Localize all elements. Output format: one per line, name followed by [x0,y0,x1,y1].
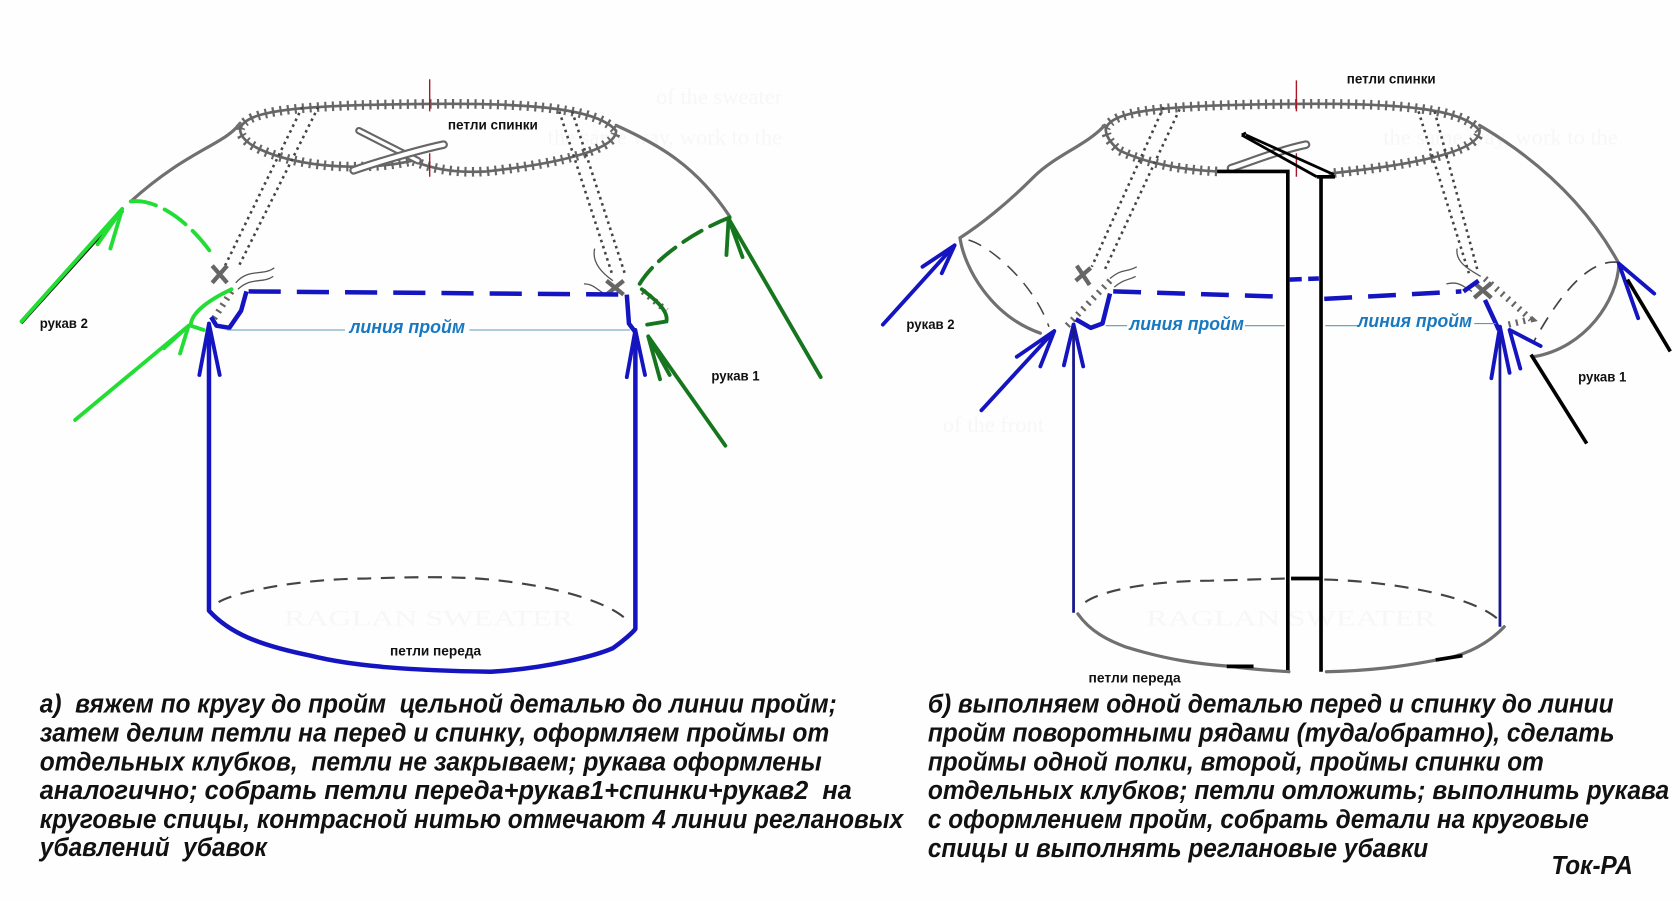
text block b: пройм поворотными рядами (туда/обратно), сделать [928,719,1615,747]
label: sleeve 2: рукав 2 [40,316,88,331]
armhole level label: линия пройм [348,317,466,337]
ghost print-through background text: the same way, work to the [1383,125,1618,150]
shoulder lines [131,123,730,216]
red centre marks [429,79,431,177]
dark green sleeve 1 edge and arrows [640,217,821,446]
raglan dotted lines [224,107,626,276]
raglan dotted lines [1092,107,1477,273]
text block b [928,690,1669,863]
red centre marks [1295,80,1297,177]
label: back stitches: петли спинки [448,118,538,133]
light green sleeve 2 edge and arrows [21,201,231,420]
ghost print-through background text: the same way, work to the [548,125,782,150]
text block b: спицы и выполнять реглановые убавки [928,835,1428,863]
black sleeve arrows [1531,280,1670,444]
armhole level labels: линия пройм [1128,314,1244,334]
text block b: с оформлением пройм, собрать детали на круговые [928,806,1589,834]
ghost print-through background text: RAGLAN SWEATER [284,606,573,631]
ghost print-through background text: of the front [943,412,1045,437]
text block a: затем делим петли на перед и спинку, оформляем проймы от [40,719,829,747]
text block a: аналогично; собрать петли переда+рукав1+спинки+рукав2 на [40,777,852,805]
needle and black opening lines [1217,133,1335,672]
knitting needles [354,131,444,170]
armhole level labels: линия пройм [1356,311,1473,331]
ghost print-through background text [284,84,1618,631]
blue front outline and armhole line [199,291,645,672]
label: front stitches: петли переда [390,644,482,659]
label: sleeve 1: рукав 1 [1578,369,1627,384]
text block a: убавлений убавок [38,834,269,862]
text block a: а) вяжем по кругу до пройм цельной деталью до линии пройм; [40,690,837,718]
dashed sleeve seams [969,240,1619,343]
text block a [38,690,905,862]
text block b: проймы одной полки, второй, проймы спинки от [928,748,1544,776]
ghost print-through background text: of the sweater [656,84,783,109]
panel: right diagram (flat knitting) [883,72,1670,685]
neck opening with stitches [1106,104,1480,174]
label: back stitches: петли спинки [1347,72,1436,87]
shoulders and sleeves [960,125,1619,357]
author signature: Ток-РА [1551,852,1633,880]
neck opening with stitches [240,104,616,172]
ghost print-through background text: RAGLAN SWEATER [1146,606,1436,631]
blue arrows, armhole and side lines [883,245,1654,627]
label: front stitches: петли переда [1089,670,1181,685]
bottom dashed hem [219,577,630,624]
armhole details [1067,249,1531,326]
text block b: б) выполняем одной деталью перед и спинку до линии [928,690,1614,718]
armhole details [212,249,666,321]
text block a: отдельных клубков, петли не закрываем; рукава оформлены [40,748,822,776]
label: sleeve 1: рукав 1 [711,368,760,383]
grey hem and bottom lines [1078,579,1504,672]
label: sleeve 2: рукав 2 [906,317,955,332]
text block a: круговые спицы, контрасной нитью отмечают 4 линии реглановых [40,806,905,834]
armhole level labels [1106,311,1496,334]
panel: left diagram (circular knitting) [21,79,821,672]
